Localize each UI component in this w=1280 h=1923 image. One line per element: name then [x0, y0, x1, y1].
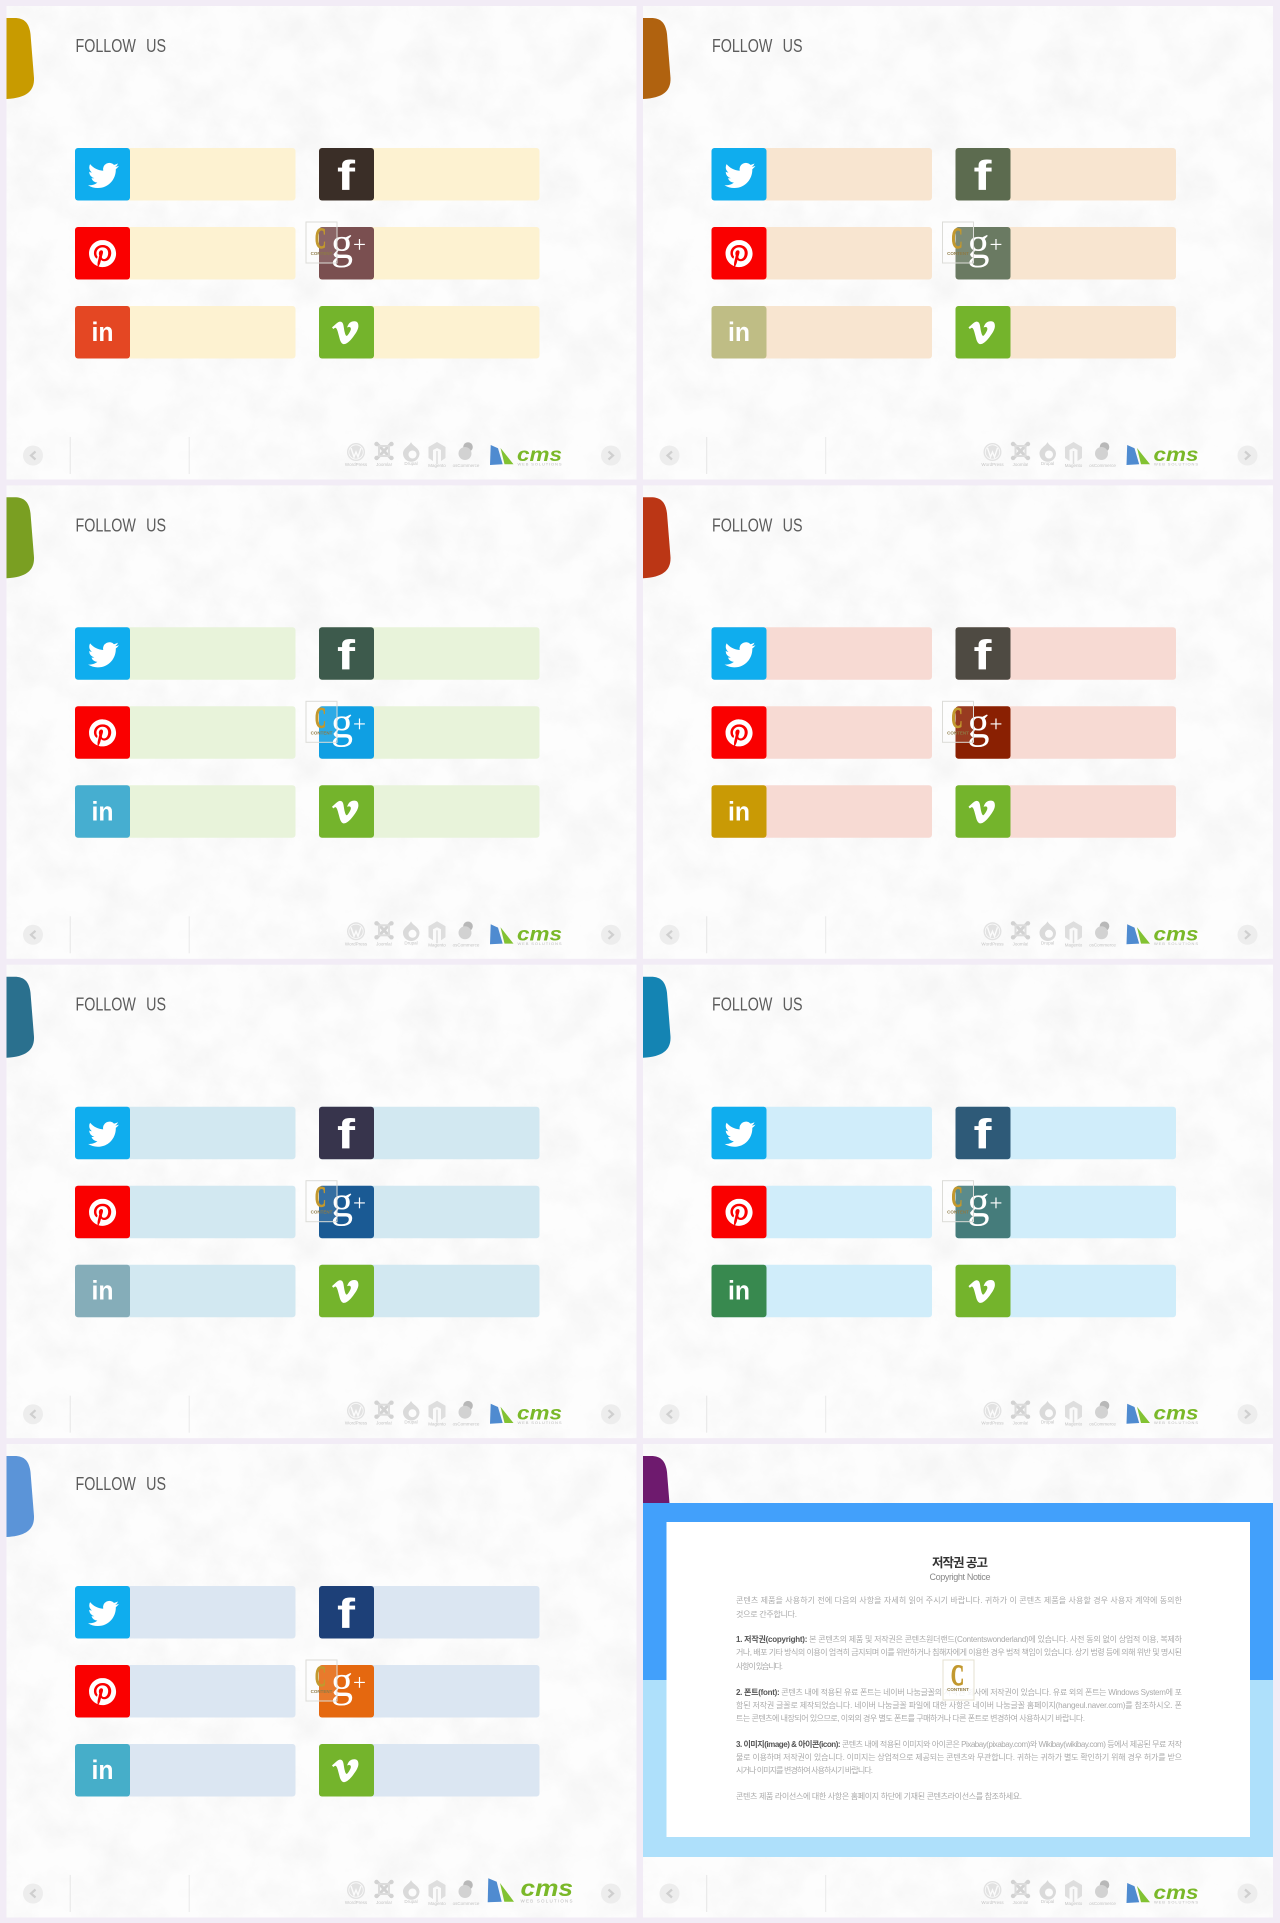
vimeo row: [956, 306, 1176, 358]
footer: Joomla!: [376, 1421, 392, 1426]
heading: FOLLOW US: [76, 515, 166, 535]
footer: WordPress: [981, 1900, 1004, 1905]
linkedin row: [75, 785, 296, 838]
pinterest row: [75, 706, 296, 759]
facebook row: [319, 148, 540, 200]
heading: FOLLOW US: [712, 515, 802, 535]
google plus row: +: [353, 232, 366, 257]
facebook row: f: [974, 152, 993, 199]
footer: Magento: [428, 942, 446, 947]
footer: [660, 437, 1258, 474]
heading: FOLLOW US: [712, 36, 802, 56]
closing line: 콘텐츠 제품 라이선스에 대한 사항은 홈페이지 하단에 기재된 콘텐츠라이선스를 참조하세요.: [736, 1791, 1022, 1801]
twitter row: [75, 1107, 296, 1159]
footer: [23, 1396, 621, 1433]
google plus row: [956, 698, 1176, 759]
heading: FOLLOW US: [76, 1474, 166, 1494]
footer: WordPress: [981, 1421, 1004, 1426]
notice title: 저작권 공고: [932, 1555, 988, 1570]
watermark: CONTENT: [947, 1687, 969, 1692]
footer: cms: [1154, 445, 1198, 466]
footer: Magento: [1065, 942, 1083, 947]
watermark: CONTENT: [947, 730, 969, 735]
watermark: CONTENT: [947, 251, 969, 256]
footer: WEB SOLUTIONS: [1154, 1900, 1198, 1904]
heading: FOLLOW US: [76, 995, 166, 1015]
watermark: C: [315, 1660, 326, 1693]
watermark: C: [952, 1181, 962, 1214]
heading: FOLLOW US: [712, 995, 802, 1015]
footer: cms: [1154, 1883, 1198, 1904]
google plus row: g: [331, 219, 353, 268]
google plus row: +: [353, 1191, 366, 1216]
section 2 font: 2. 폰트(font): 콘텐츠 내에 적용된 유료 폰트는 네이버 나눔글꼴의 저작권 회사에 저작권이 있습니다. 유료 외의 폰트는 Windows System에 포: [736, 1687, 1182, 1697]
section 3 image and icon: 시거나 이미지를 변경하여 사용하시기 바랍니다.: [736, 1765, 873, 1775]
section 2 font: 함된 저작권 글꼴로 제작되었습니다. 네이버 나눔글꼴 파일에 대한 사항은 네이버 나눔글꼴 홈페이지(hangeul.naver.com)를 참조하시오. 폰: [736, 1700, 1182, 1710]
watermark: C: [952, 222, 962, 255]
linkedin row: in: [92, 796, 114, 826]
google plus row: g: [968, 219, 990, 268]
watermark: C: [315, 1181, 326, 1214]
linkedin row: in: [728, 317, 750, 347]
footer: [660, 1875, 1258, 1912]
footer: Drupal: [404, 940, 418, 945]
watermark: CONTENT: [311, 251, 333, 256]
google plus row: g: [331, 698, 353, 747]
google plus row: [319, 219, 540, 280]
footer: WordPress: [345, 462, 368, 467]
footer: Joomla!: [1013, 941, 1028, 946]
footer: WordPress: [981, 941, 1004, 946]
footer: cms: [1154, 1404, 1198, 1425]
section 3 image and icon: 물로 이용하며 저작권이 있습니다. 이미지는 상업적으로 제공되는 콘텐츠와 무관합니다. 귀하는 귀하가 별도 확인하기 위해 경우 허가를 받으: [736, 1752, 1182, 1762]
section 3 image and icon: 3. 이미지(image) & 아이콘(icon): 콘텐츠 내에 적용된 이미지와 아이콘은 Pixabay(pixabay.com)와 Wikibay(wikibay.com) 등에서 제공된 무료 저작: [736, 1739, 1183, 1749]
facebook row: [319, 1107, 540, 1159]
google plus row: g: [968, 698, 990, 747]
panel: periwinkle follow us slide: [6, 1444, 636, 1918]
facebook row: [956, 1107, 1176, 1159]
footer: Drupal: [404, 1420, 418, 1425]
google plus row: [956, 1178, 1176, 1238]
panel: teal follow us slide: [6, 965, 636, 1438]
accent tab: [643, 18, 671, 99]
light blue band: [643, 1680, 1273, 1857]
watermark: C: [315, 222, 326, 255]
watermark: [306, 222, 337, 263]
watermark: C: [315, 701, 326, 734]
footer: osCommerce: [1089, 1901, 1116, 1906]
watermark: C: [951, 1659, 964, 1692]
section 1 copyright: 사항이 있습니다.: [736, 1661, 783, 1671]
twitter row: [712, 148, 932, 200]
footer: WEB SOLUTIONS: [1154, 462, 1198, 466]
watermark: [306, 1181, 337, 1222]
twitter row: [75, 148, 296, 200]
section 2 font: [736, 1687, 1182, 1723]
pinterest row: [75, 1665, 296, 1718]
footer with large logo: [23, 1875, 621, 1912]
footer: Drupal: [1041, 461, 1054, 466]
vimeo row: [956, 785, 1176, 838]
google plus row: +: [990, 1191, 1002, 1216]
pinterest row: [712, 227, 932, 280]
footer: osCommerce: [453, 942, 480, 947]
facebook row: f: [974, 1111, 993, 1158]
section 3 image and icon: [736, 1739, 1183, 1775]
watermark: C: [952, 701, 962, 734]
linkedin row: [712, 306, 932, 358]
panel: yellow follow us slide: [6, 6, 636, 480]
footer: WordPress: [345, 941, 368, 946]
footer: WordPress: [981, 462, 1004, 467]
facebook row: [319, 1586, 540, 1638]
footer: cms: [1154, 924, 1198, 945]
footer: osCommerce: [453, 1422, 480, 1427]
footer: Magento: [1065, 1422, 1083, 1427]
footer: Joomla!: [1013, 1421, 1028, 1426]
intro paragraph: 콘텐츠 제품을 사용하기 전에 다음의 사항을 자세히 읽어 주시기 바랍니다. 귀하가 이 콘텐츠 제품을 사용할 경우 사용자 계약에 동의한: [736, 1595, 1183, 1605]
footer: Magento: [1065, 463, 1083, 468]
accent tab: [6, 18, 34, 99]
google plus row: +: [353, 1670, 366, 1695]
footer: [660, 1396, 1258, 1433]
panel: orange follow us slide: [643, 6, 1273, 480]
footer: [660, 916, 1258, 953]
white notice card: [666, 1522, 1250, 1837]
footer: WEB SOLUTIONS: [518, 941, 562, 946]
accent tab: [6, 1456, 34, 1537]
watermark: CONTENT: [311, 1689, 333, 1694]
watermark: [942, 222, 974, 263]
footer with large logo: WEB SOLUTIONS: [520, 1898, 572, 1904]
footer: [23, 916, 621, 953]
footer: cms: [517, 924, 562, 945]
watermark: CONTENT: [311, 1210, 333, 1215]
google plus row: g: [968, 1178, 990, 1227]
panel: copyright notice slide: [643, 1444, 1273, 1918]
footer: WordPress: [345, 1421, 368, 1426]
footer with large logo: cms: [520, 1875, 573, 1901]
section 1 copyright: [736, 1634, 1183, 1671]
footer: Magento: [1065, 1901, 1083, 1906]
footer with large logo: WordPress: [345, 1900, 368, 1905]
vimeo row: [319, 1265, 540, 1317]
footer: Joomla!: [1013, 1900, 1028, 1905]
intro paragraph: 것으로 간주합니다.: [736, 1609, 797, 1619]
linkedin row: [75, 306, 296, 358]
pinterest row: [75, 1186, 296, 1238]
footer: WEB SOLUTIONS: [1154, 941, 1198, 946]
linkedin row: [712, 785, 932, 838]
facebook row: f: [337, 1111, 356, 1158]
google plus row: [956, 219, 1176, 280]
twitter row: [712, 627, 932, 680]
facebook row: f: [337, 1590, 356, 1637]
twitter row: [75, 627, 296, 680]
footer with large logo: osCommerce: [453, 1901, 480, 1906]
footer: osCommerce: [453, 463, 480, 468]
section 1 copyright: 거나, 배포 기타 방식의 이용이 엄격히 금지되며 이를 위반하거나 침해자에게 이용한 경우 법적 책임이 있습니다. 상기 법령 등에 의해 위반 및 명시된: [736, 1647, 1182, 1657]
pinterest row: [712, 1186, 932, 1238]
facebook row: f: [337, 152, 356, 199]
footer: Magento: [428, 463, 446, 468]
panel: green follow us slide: [6, 485, 636, 959]
linkedin row: [75, 1744, 296, 1796]
footer: WEB SOLUTIONS: [1154, 1420, 1198, 1425]
footer: cms: [517, 445, 562, 466]
footer: osCommerce: [1089, 942, 1116, 947]
google plus row: [319, 698, 540, 759]
linkedin row: in: [92, 1755, 114, 1785]
google plus row: [319, 1657, 540, 1718]
google plus row: g: [331, 1178, 353, 1227]
panel: blue follow us slide: [643, 965, 1273, 1438]
google plus row: +: [990, 232, 1002, 257]
accent tab: [6, 977, 34, 1058]
twitter row: [712, 1107, 932, 1159]
intro paragraph: [736, 1595, 1183, 1619]
watermark: [306, 701, 337, 742]
facebook row: [956, 627, 1176, 680]
facebook row: [319, 627, 540, 680]
linkedin row: in: [92, 317, 114, 347]
section 1 copyright: 1. 저작권(copyright): 본 콘텐츠의 제품 및 저작권은 콘텐츠원더랜드(Contentswonderland)에 있습니다. 사전 동의 없이 상업적 이용, 복제하: [736, 1634, 1183, 1644]
footer: Joomla!: [376, 941, 392, 946]
google plus row: +: [990, 711, 1002, 736]
vimeo row: [319, 785, 540, 838]
footer: Drupal: [404, 461, 418, 466]
facebook row: f: [337, 631, 356, 678]
footer: osCommerce: [1089, 1422, 1116, 1427]
footer with large logo: Drupal: [404, 1899, 418, 1904]
facebook row: [956, 148, 1176, 200]
vimeo row: [956, 1265, 1176, 1317]
accent tab: [643, 497, 671, 578]
section 2 font: 트는 콘텐츠에 내장되어 있으므로, 이외의 경우 별도 폰트를 구매하거나 다른 폰트로 변경하여 사용하시기 바랍니다.: [736, 1713, 1085, 1723]
watermark: CONTENT: [947, 1210, 969, 1215]
watermark: [942, 1181, 974, 1222]
google plus row: g: [331, 1657, 353, 1706]
footer: Joomla!: [1013, 462, 1028, 467]
pinterest row: [75, 227, 296, 280]
footer with large logo: Joomla!: [376, 1900, 392, 1905]
accent tab: [643, 1456, 671, 1537]
watermark: CONTENT: [311, 730, 333, 735]
footer: cms: [517, 1404, 562, 1425]
linkedin row: in: [92, 1276, 114, 1306]
pinterest row: [712, 706, 932, 759]
google plus row: [319, 1178, 540, 1238]
google plus row: +: [353, 711, 366, 736]
footer: [23, 437, 621, 474]
accent tab: [643, 977, 671, 1058]
footer: Drupal: [1041, 940, 1054, 945]
watermark: [306, 1660, 337, 1701]
footer: Drupal: [1041, 1899, 1054, 1904]
facebook row: f: [974, 631, 993, 678]
heading: FOLLOW US: [76, 36, 166, 56]
footer: osCommerce: [1089, 463, 1116, 468]
linkedin row: [712, 1265, 932, 1317]
watermark: [943, 1659, 974, 1700]
footer with large logo: Magento: [428, 1901, 446, 1906]
vimeo row: [319, 306, 540, 358]
footer: Drupal: [1041, 1420, 1054, 1425]
watermark: [942, 701, 974, 742]
linkedin row: in: [728, 796, 750, 826]
dark blue band: [643, 1503, 1273, 1680]
linkedin row: [75, 1265, 296, 1317]
footer: WEB SOLUTIONS: [518, 1420, 562, 1425]
twitter row: [75, 1586, 296, 1638]
footer: Magento: [428, 1422, 446, 1427]
panel: red follow us slide: [643, 485, 1273, 959]
linkedin row: in: [728, 1276, 750, 1306]
accent tab: [6, 497, 34, 578]
notice subtitle: Copyright Notice: [930, 1572, 990, 1582]
footer: WEB SOLUTIONS: [518, 462, 562, 466]
vimeo row: [319, 1744, 540, 1796]
footer: Joomla!: [376, 462, 392, 467]
